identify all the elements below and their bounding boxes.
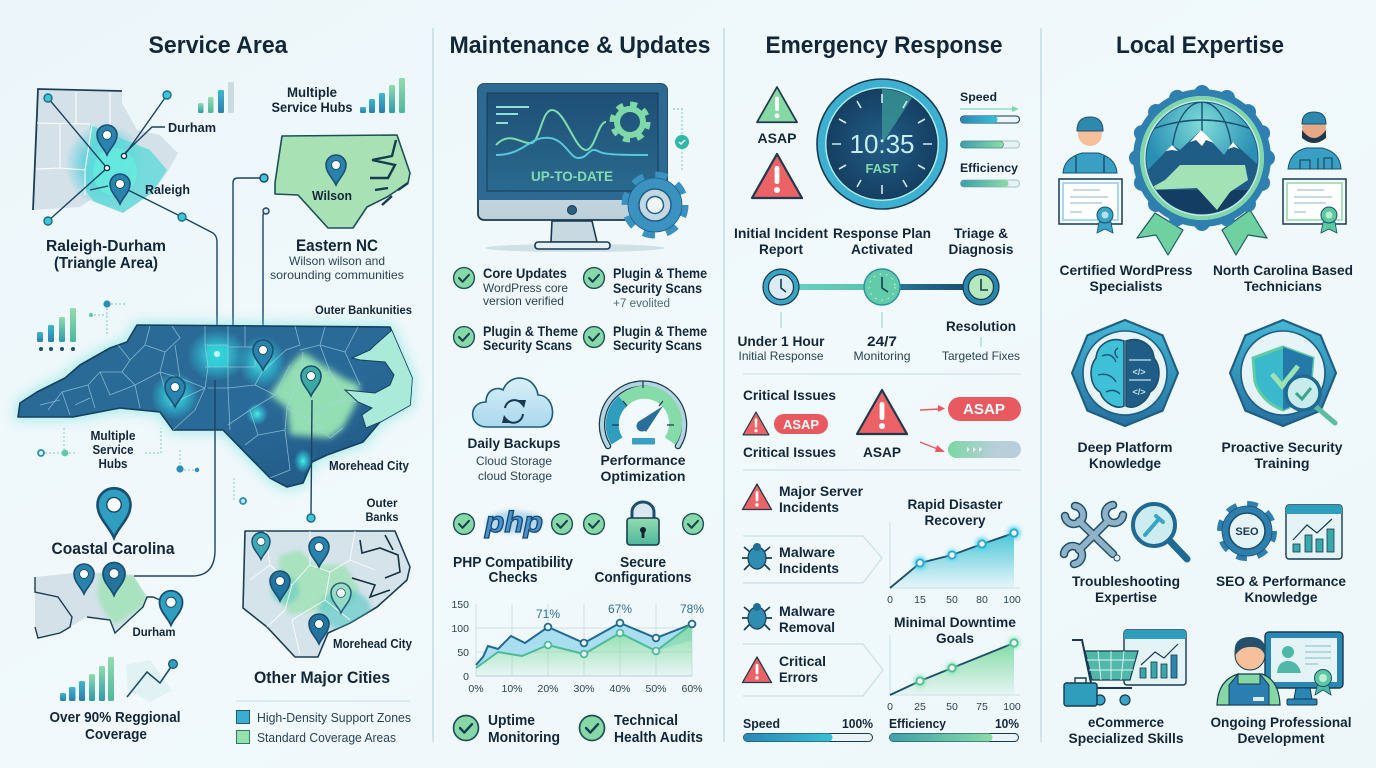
check item: technical health audits: Health Audits	[614, 729, 703, 746]
checklist: core updates	[454, 265, 568, 308]
heading: other major cities: Other Major Cities	[254, 668, 390, 687]
heading: emergency response: Emergency Response	[766, 32, 1002, 59]
meter: efficiency: Efficiency	[960, 161, 1018, 175]
chart: performance line chart: 60%	[681, 683, 703, 695]
text: Eastern NC caption: sorounding communities	[270, 268, 404, 282]
text: PHP compatibility: Checks	[488, 569, 538, 586]
incident: major server: Major Server	[779, 483, 864, 499]
text: minimal downtime goals: Minimal Downtime	[894, 614, 1016, 630]
chart: performance line chart: 71%	[536, 607, 560, 621]
label: Outer Banks	[366, 496, 399, 524]
text: deep platform knowledge: Knowledge	[1089, 455, 1161, 471]
icon: response clock: FAST	[866, 161, 899, 176]
chart: performance line chart: 100	[451, 623, 469, 635]
text: timeline step labels: Response Plan	[833, 225, 931, 241]
label: Durham coastal: Durham	[132, 625, 176, 639]
legend	[236, 710, 411, 745]
chart: performance line chart: 0	[463, 671, 469, 683]
map: Raleigh-Durham triangle	[33, 89, 217, 350]
icon: green warning	[757, 87, 797, 122]
text: regional coverage	[50, 709, 180, 743]
text: troubleshooting: Expertise	[1095, 589, 1157, 605]
text: performance optimization	[600, 452, 686, 484]
legend: High-Density Support Zones	[257, 711, 411, 725]
icon: wrenches and magnifier	[1064, 504, 1187, 564]
chart: minimal downtime: 0	[887, 701, 893, 713]
text: secure configurations	[594, 554, 692, 586]
critical issues block: Critical Issues	[743, 387, 836, 403]
text: under 1 hour: Under 1 Hour	[738, 333, 825, 349]
text: daily backups	[468, 435, 561, 483]
bars: small signal	[198, 82, 234, 113]
text: 24/7 monitoring: Monitoring	[854, 349, 910, 363]
chevron panel: critical errors: Errors	[779, 669, 818, 685]
chart: performance line chart: 67%	[608, 602, 632, 616]
label: multiple service hubs lower: Service	[92, 442, 134, 457]
text: performance optimization: Optimization	[600, 468, 686, 484]
label: Wilson: Wilson	[312, 189, 352, 203]
label: Morehead City: Morehead City	[329, 459, 409, 473]
incident: major server: Incidents	[779, 499, 839, 515]
text: daily backups: Daily Backups	[468, 435, 561, 451]
icon: PHP logo: php	[484, 506, 543, 539]
icon: technician with monitor	[1217, 632, 1343, 705]
label: multiple service hubs: Multiple	[287, 84, 337, 100]
text: proactive security training	[1222, 439, 1343, 471]
chevron panel: critical errors: Critical	[779, 653, 826, 669]
panel: maintenance and updates	[450, 32, 710, 746]
critical issues block: ASAP	[783, 417, 819, 432]
text: Eastern NC caption	[270, 254, 404, 282]
icon: brain badge	[1072, 320, 1178, 426]
text: 24/7 monitoring	[854, 333, 910, 363]
panel: local expertise	[1059, 32, 1353, 746]
text: daily backups: Cloud Storage	[476, 454, 552, 468]
label: multiple service hubs: Service Hubs	[272, 99, 353, 115]
text: SEO and performance	[1216, 573, 1346, 605]
label: multiple service hubs	[272, 84, 353, 115]
incident: malware removal: Removal	[779, 619, 835, 635]
text: proactive security training: Proactive Security	[1222, 439, 1343, 455]
text: SEO and performance: SEO & Performance	[1216, 573, 1346, 589]
check item: technical health audits: Technical	[614, 712, 678, 729]
text: resolution: Targeted Fixes	[942, 349, 1020, 363]
text: NC technicians	[1213, 262, 1353, 294]
chart: regional coverage bars and trend	[60, 657, 177, 702]
meter: efficiency 10%: 10%	[995, 716, 1019, 731]
meter: efficiency 10%: Efficiency	[889, 716, 947, 731]
panel: emergency response	[734, 32, 1021, 742]
check item: technical health audits	[580, 712, 703, 746]
icon: worker with certificate, right	[1283, 112, 1346, 233]
icon: brain badge: </>	[1132, 367, 1146, 377]
heading: Raleigh-Durham: (Triangle Area)	[54, 255, 158, 272]
chart: performance line chart: 50%	[645, 683, 667, 695]
heading: Raleigh-Durham	[46, 238, 166, 272]
text: timeline step labels: Diagnosis	[948, 241, 1014, 257]
icon: shopping cart, window, briefcase	[1064, 630, 1186, 706]
chevron panel: critical errors	[742, 644, 883, 696]
chart: minimal downtime: 50	[946, 701, 958, 713]
text: ongoing development: Ongoing Professional	[1210, 714, 1352, 730]
text: troubleshooting	[1072, 573, 1180, 605]
arrow and pill: ASAP	[920, 397, 1021, 421]
label: multiple service hubs lower	[90, 428, 136, 471]
text: timeline step labels: Triage &	[954, 225, 1008, 241]
connector: hub node to main map	[233, 174, 269, 365]
checklist: plugin scans 1: Plugin & Theme	[613, 265, 707, 281]
icon: large pin	[98, 488, 130, 538]
icon: monitor with gears	[478, 84, 685, 252]
text: certified specialists: Specialists	[1090, 278, 1163, 294]
icon: brain badge: </>	[1132, 387, 1146, 397]
checklist: plugin scans 3: Plugin & Theme	[613, 323, 707, 339]
text: minimal downtime goals: Goals	[936, 630, 974, 646]
text: resolution: Resolution	[946, 318, 1016, 334]
checklist: core updates: version verified	[483, 294, 564, 308]
label: Outer Bankunities: Outer Bankunities	[315, 303, 412, 317]
checklist: plugin scans 1: Security Scans	[613, 280, 702, 296]
label: Outer Banks: Outer	[366, 496, 398, 510]
check item: uptime monitoring: Uptime	[488, 712, 535, 729]
label: Morehead City lower: Morehead City	[333, 637, 412, 651]
text: rapid disaster recovery: Rapid Disaster	[908, 496, 1003, 512]
arrow and pill: ASAP: ASAP	[963, 401, 1005, 418]
text: under 1 hour	[738, 333, 825, 363]
chart: rapid recovery: 15	[914, 594, 926, 606]
text: ecommerce skills	[1068, 714, 1184, 746]
text: ongoing development	[1210, 714, 1352, 746]
node: Morehead connector end	[307, 514, 315, 522]
incident: major server	[742, 483, 864, 515]
chart: rapid recovery: 0	[887, 594, 893, 606]
checklist: plugin scans 1: +7 evolited	[613, 298, 670, 310]
chart: rapid recovery	[887, 522, 1021, 606]
text: timeline step labels	[734, 225, 1014, 257]
chart: rapid recovery: 80	[976, 594, 988, 606]
checklist: plugin scans 2: Plugin & Theme	[483, 323, 578, 339]
text: ecommerce skills: eCommerce	[1088, 714, 1164, 730]
meter: speed: Speed	[960, 90, 997, 104]
meter: unnamed	[960, 141, 1020, 148]
text: proactive security training: Training	[1254, 455, 1310, 471]
heading: service area: Service Area	[148, 32, 288, 59]
meter: efficiency 10%	[889, 716, 1019, 742]
text: deep platform knowledge	[1078, 439, 1172, 471]
arrow and pill: progress	[920, 441, 1021, 458]
label: Raleigh: Raleigh	[145, 182, 190, 197]
check item: uptime monitoring	[454, 712, 560, 746]
icon: SEO gear and chart window	[1220, 504, 1342, 559]
critical issues block: Critical Issues	[743, 444, 836, 460]
bars: hubs	[360, 78, 405, 113]
text: SEO and performance: Knowledge	[1244, 589, 1318, 605]
chart: performance line chart: 150	[451, 599, 469, 611]
map: North Carolina	[18, 325, 414, 576]
map: other major cities	[243, 531, 410, 657]
text: daily backups: cloud Storage	[478, 469, 552, 483]
incident: malware removal: Malware	[779, 603, 835, 619]
meter: efficiency	[960, 161, 1020, 187]
icon: performance gauge	[602, 381, 684, 446]
text: NC technicians: Technicians	[1244, 278, 1322, 294]
checklist: plugin scans 3	[584, 323, 707, 353]
heading: Eastern NC: Eastern NC	[296, 236, 378, 255]
checklist: plugin scans 2: Security Scans	[483, 337, 572, 353]
text: timeline step labels: Initial Incident	[734, 225, 828, 241]
text: secure configurations: Configurations	[594, 569, 692, 586]
chart: performance line chart	[451, 599, 704, 695]
text: PHP compatibility: PHP Compatibility	[453, 554, 574, 571]
chart: rapid recovery: 100	[1003, 594, 1021, 606]
incident: malware removal	[742, 603, 835, 635]
checklist: core updates: Core Updates	[483, 265, 567, 281]
meter: speed	[960, 90, 1020, 123]
chart: minimal downtime	[887, 635, 1021, 713]
text: deep platform knowledge: Deep Platform	[1078, 439, 1172, 455]
label: Outer Banks: Banks	[366, 510, 399, 524]
text: regional coverage: Over 90% Reggional	[50, 709, 180, 726]
icon: large red warning	[857, 390, 907, 434]
icon: response clock: 10:35	[850, 129, 914, 159]
checklist: plugin scans 2	[454, 323, 578, 353]
text: troubleshooting: Troubleshooting	[1072, 573, 1180, 589]
chevron panel: malware incidents	[742, 536, 882, 583]
text: under 1 hour: Initial Response	[738, 349, 824, 363]
chart: rapid recovery: 50	[946, 594, 958, 606]
meter: speed 100%: Speed	[743, 716, 780, 731]
icon: padlock	[627, 502, 659, 545]
timeline	[763, 269, 999, 347]
text: PHP compatibility	[453, 554, 574, 586]
icon: cloud backup	[473, 378, 553, 427]
text: regional coverage: Coverage	[85, 726, 147, 743]
text: performance optimization: Performance	[600, 452, 686, 468]
icon: red warning	[752, 154, 802, 198]
chart: performance line chart: 20%	[537, 683, 559, 695]
label: multiple service hubs lower: Hubs	[98, 456, 128, 471]
legend: Standard Coverage Areas	[257, 731, 396, 745]
chevron panel: malware incidents: Incidents	[779, 560, 839, 576]
chart: performance line chart: 10%	[501, 683, 523, 695]
heading: Coastal Carolina: Coastal Carolina	[52, 539, 175, 558]
text: certified specialists	[1060, 262, 1193, 294]
icon: response clock	[817, 79, 947, 209]
checks row	[454, 514, 703, 534]
text: resolution	[942, 318, 1020, 363]
accent: dotted hub nodes	[38, 428, 246, 504]
bars: coverage signal	[37, 308, 76, 351]
icon: NC badge	[1133, 89, 1271, 255]
meter: speed 100%: 100%	[842, 716, 873, 731]
label: ASAP: ASAP	[758, 130, 796, 146]
label: multiple service hubs lower: Multiple	[90, 428, 136, 443]
text: secure configurations: Secure	[620, 554, 666, 571]
text: Eastern NC caption: Wilson wilson and	[289, 254, 385, 268]
meter: speed 100%	[743, 716, 873, 742]
text: certified specialists: Certified WordPress	[1060, 262, 1193, 278]
check item: uptime monitoring: Monitoring	[488, 729, 560, 746]
chart: minimal downtime: 75	[976, 701, 988, 713]
chart: performance line chart: 40%	[609, 683, 631, 695]
text: timeline step labels: Activated	[851, 241, 913, 257]
text: ecommerce skills: Specialized Skills	[1068, 730, 1184, 746]
text: ongoing development: Development	[1238, 730, 1325, 746]
chart: minimal downtime: 100	[1003, 701, 1021, 713]
text: rapid disaster recovery	[908, 496, 1003, 528]
checklist: plugin scans 1	[584, 265, 707, 310]
map: Coastal Carolina	[35, 562, 182, 638]
icon: shield badge	[1230, 320, 1336, 426]
icon: monitor with gears: UP-TO-DATE	[531, 168, 613, 184]
text: rapid disaster recovery: Recovery	[924, 512, 986, 528]
label: Durham: Durham	[168, 120, 216, 135]
chevron panel: malware incidents: Malware	[779, 544, 835, 560]
icon: dotted check indicator	[673, 109, 689, 172]
text: 24/7 monitoring: 24/7	[867, 333, 897, 349]
chart: minimal downtime: 25	[914, 701, 926, 713]
chart: performance line chart: 30%	[573, 683, 595, 695]
checklist: plugin scans 3: Security Scans	[613, 337, 702, 353]
map: Eastern NC	[275, 135, 410, 228]
icon: SEO gear and chart window: SEO	[1235, 526, 1259, 538]
text: NC technicians: North Carolina Based	[1213, 262, 1353, 278]
chart: performance line chart: 50	[457, 647, 469, 659]
checklist: core updates: WordPress core	[483, 281, 568, 295]
accent: dotted nodes	[89, 300, 125, 335]
panel: service area	[18, 32, 414, 745]
heading: Raleigh-Durham: Raleigh-Durham	[46, 238, 166, 255]
icon: worker with certificate, left	[1059, 117, 1122, 233]
label: ASAP large: ASAP	[863, 444, 901, 460]
critical issues block	[743, 387, 836, 460]
text: minimal downtime goals	[894, 614, 1016, 646]
chart: performance line chart: 78%	[680, 602, 704, 616]
heading: local expertise: Local Expertise	[1116, 32, 1284, 59]
chart: performance line chart: 0%	[468, 683, 484, 695]
heading: maintenance: Maintenance & Updates	[450, 32, 710, 59]
text: timeline step labels: Report	[759, 241, 803, 257]
